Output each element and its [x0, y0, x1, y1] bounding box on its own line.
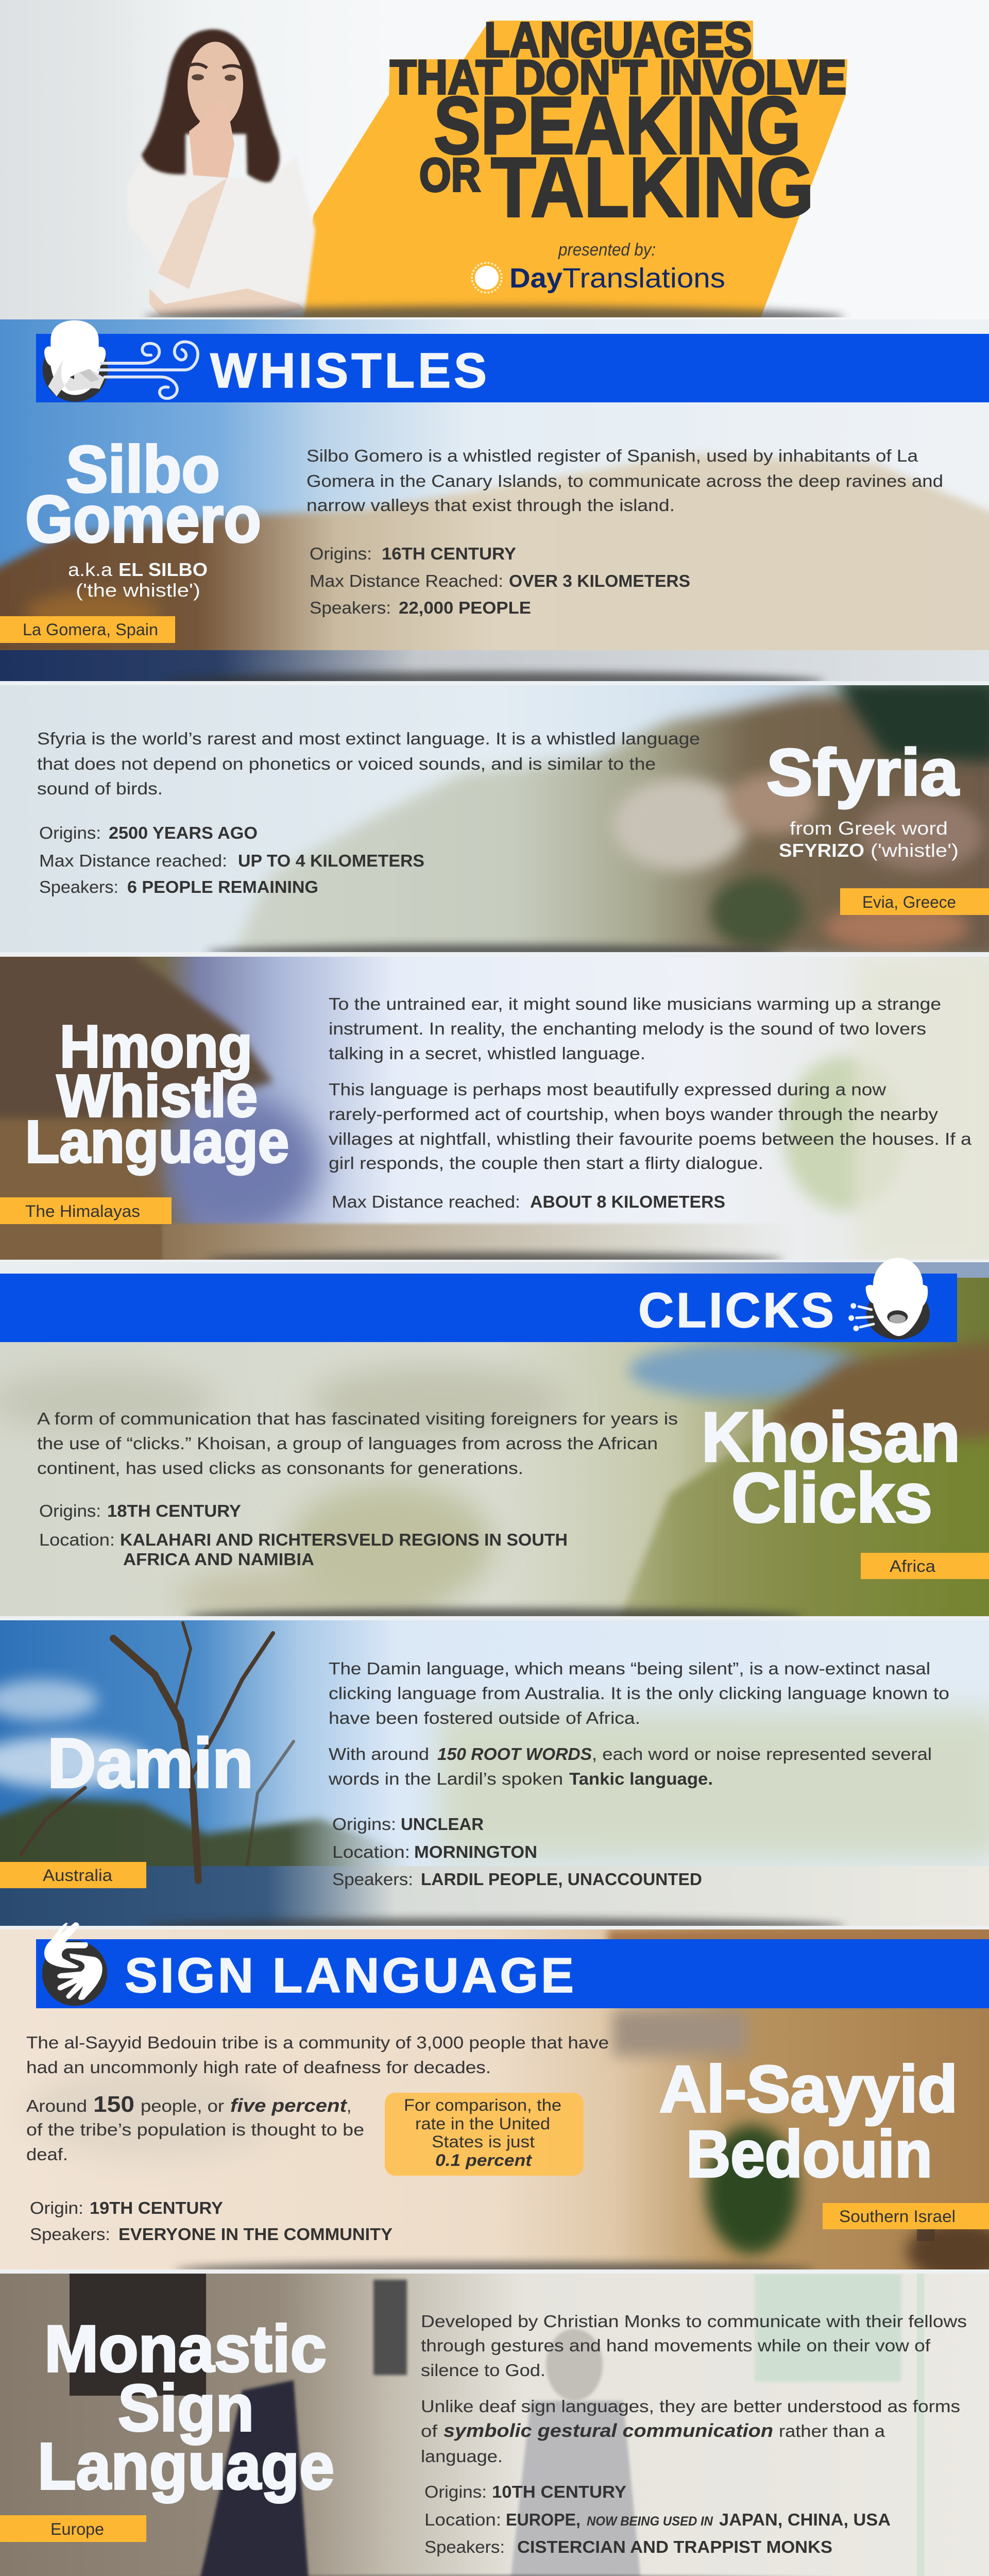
description: instrument. In reality, the enchanting melody is the sound of two lovers	[329, 1019, 926, 1038]
description	[329, 994, 972, 1173]
title: THAT DON'T INVOLVE	[390, 50, 846, 104]
description: words in the Lardil’s spoken	[328, 1769, 563, 1788]
language name heading: Al-Sayyid	[659, 2053, 958, 2126]
title: OR	[419, 149, 481, 201]
language name heading	[659, 2053, 958, 2191]
language name heading	[38, 2312, 334, 2503]
icon: whistling head	[43, 320, 198, 402]
background photo: monks by stone wall	[0, 2269, 989, 2576]
banner: sign language	[36, 1922, 989, 2008]
facts	[30, 2198, 393, 2244]
description	[37, 1409, 678, 1478]
divider strip	[0, 2269, 989, 2274]
description: had an uncommonly high rate of deafness for decades.	[26, 2058, 491, 2077]
subtitle	[779, 818, 959, 861]
facts: Speakers:	[424, 2537, 505, 2556]
divider strip	[0, 1926, 989, 1929]
description	[26, 2033, 609, 2164]
facts	[424, 2482, 891, 2556]
presented by logo: Translations	[562, 263, 725, 294]
facts: Origins:	[424, 2482, 487, 2501]
banner: whistles	[36, 320, 989, 402]
facts: AFRICA AND NAMIBIA	[123, 1550, 314, 1569]
facts: EUROPE,	[506, 2510, 581, 2529]
facts: 16TH CENTURY	[382, 544, 516, 563]
facts: ABOUT 8 KILOMETERS	[530, 1192, 725, 1211]
description	[37, 729, 700, 798]
location label: Europe	[50, 2520, 104, 2538]
location label	[823, 2203, 989, 2229]
facts: Speakers:	[39, 877, 118, 896]
language name heading: Bedouin	[686, 2117, 932, 2191]
background photo: thatched hut and misty valley	[0, 948, 989, 1267]
panel: Sfyria	[0, 680, 989, 960]
facts: 22,000 PEOPLE	[399, 598, 531, 617]
presented by logo	[472, 240, 725, 294]
callout: comparison with US rate	[385, 2093, 584, 2176]
title: LANGUAGES	[484, 12, 752, 67]
description: Gomera in the Canary Islands, to communicate across the deep ravines and	[306, 471, 943, 490]
description: Around	[26, 2096, 87, 2115]
description: of	[421, 2421, 438, 2441]
description: rarely-performed act of courtship, when boys wander through the nearby	[329, 1105, 939, 1124]
background photo: La Gomera cliffs	[0, 319, 989, 690]
description: people, or	[141, 2096, 224, 2115]
title	[390, 12, 846, 234]
description: five percent	[230, 2095, 348, 2116]
facts: Max Distance Reached:	[310, 571, 503, 590]
language name heading: Monastic	[44, 2312, 327, 2386]
callout: comparison with US rate: rate in the United	[415, 2114, 550, 2133]
facts: Max Distance reached:	[39, 851, 227, 870]
facts: 19TH CENTURY	[90, 2198, 223, 2217]
description: , each word or noise represented several	[592, 1744, 932, 1764]
callout: comparison with US rate: 0.1 percent	[435, 2151, 532, 2170]
description: villages at nightfall, whistling their favourite poems between the houses. If a	[329, 1129, 972, 1148]
icon: clicking head	[850, 1258, 930, 1340]
facts: Origin:	[30, 2198, 83, 2217]
subtitle: SFYRIZO	[779, 840, 864, 861]
facts: 10TH CENTURY	[492, 2482, 626, 2501]
location label: Africa	[890, 1557, 935, 1575]
a.k.a subtitle: ('the whistle')	[76, 580, 200, 601]
background photo: African canyon	[0, 1262, 989, 1628]
facts: 6 PEOPLE REMAINING	[127, 877, 318, 896]
description: the use of “clicks.” Khoisan, a group of languages from across the African	[37, 1434, 658, 1453]
banner: whistles: WHISTLES	[210, 343, 487, 398]
language name heading: Language	[25, 1108, 289, 1175]
facts: Origins:	[332, 1815, 396, 1834]
language name heading: Sign	[118, 2371, 254, 2445]
divider strip	[0, 952, 989, 957]
location label: La Gomera, Spain	[23, 620, 158, 639]
description: sound of birds.	[37, 779, 163, 798]
panel: Silbo Gomero	[0, 319, 989, 690]
header section	[0, 0, 847, 319]
panel: Damin	[0, 1620, 989, 1934]
description: Developed by Christian Monks to communicate with their fellows	[421, 2312, 967, 2331]
location label: Southern Israel	[839, 2207, 956, 2226]
description: rather than a	[779, 2421, 885, 2441]
facts	[310, 544, 690, 617]
language name heading: Language	[38, 2430, 334, 2503]
description: Unlike deaf sign languages, they are better understood as forms	[421, 2397, 960, 2416]
subtitle: from Greek word	[790, 818, 948, 839]
description: Sfyria is the world’s rarest and most extinct language. It is a whistled language	[37, 729, 700, 748]
location label	[0, 1862, 146, 1888]
description: have been fostered outside of Africa.	[329, 1708, 640, 1727]
background photo: stone buildings in Israel	[0, 1929, 989, 2282]
panel: Hmong Whistle Language	[0, 948, 989, 1267]
facts: NOW BEING USED IN	[587, 2514, 713, 2529]
location label	[0, 616, 175, 643]
language name heading: Hmong	[60, 1013, 252, 1080]
facts: Speakers:	[310, 598, 391, 617]
description: ,	[347, 2096, 351, 2115]
language name heading: Gomero	[25, 483, 261, 556]
a.k.a subtitle: a.k.a	[68, 559, 113, 580]
location label	[861, 1553, 989, 1579]
description: talking in a secret, whistled language.	[329, 1044, 645, 1063]
callout: comparison with US rate: States is just	[432, 2132, 535, 2151]
title: SPEAKING	[434, 80, 801, 171]
facts: EVERYONE IN THE COMMUNITY	[118, 2225, 393, 2244]
facts: CISTERCIAN AND TRAPPIST MONKS	[517, 2537, 832, 2556]
banner: sign language: SIGN LANGUAGE	[125, 1948, 574, 2003]
presented by logo: Day	[509, 263, 562, 294]
facts: 2500 YEARS AGO	[109, 823, 258, 842]
language name heading	[25, 1013, 289, 1175]
description: A form of communication that has fascinated visiting foreigners for years is	[37, 1409, 678, 1428]
facts: Origins:	[39, 823, 101, 842]
description	[328, 1659, 949, 1788]
description: Tankic language.	[569, 1769, 713, 1788]
panel: Khoisan Clicks	[0, 1262, 989, 1628]
location label: Australia	[43, 1866, 112, 1885]
description: 150 ROOT WORDS	[437, 1744, 592, 1764]
location label	[840, 888, 989, 915]
facts: Location:	[39, 1530, 115, 1549]
facts	[39, 1501, 568, 1569]
facts: KALAHARI AND RICHTERSVELD REGIONS IN SOUTH	[120, 1530, 568, 1549]
banner: clicks	[0, 1258, 957, 1342]
facts: Speakers:	[30, 2225, 110, 2244]
facts: JAPAN, CHINA, USA	[719, 2510, 891, 2529]
facts	[332, 1192, 725, 1211]
facts: UNCLEAR	[401, 1815, 484, 1834]
photo of woman covering her mouth	[126, 29, 315, 317]
description: The Damin language, which means “being silent”, is a now-extinct nasal	[329, 1659, 930, 1678]
description	[306, 446, 943, 515]
description: silence to God.	[421, 2361, 545, 2380]
facts	[39, 823, 424, 896]
subtitle: ('whistle')	[871, 840, 959, 861]
description: deaf.	[26, 2145, 68, 2164]
description: of the tribe’s population is thought to be	[26, 2120, 364, 2139]
description: language.	[421, 2447, 503, 2466]
header background	[0, 0, 989, 319]
language name heading: Silbo	[66, 433, 220, 506]
location label	[0, 1197, 172, 1224]
description: This language is perhaps most beautifully expressed during a now	[329, 1080, 886, 1099]
description: symbolic gestural communication	[444, 2420, 773, 2441]
header bottom shadow	[142, 300, 847, 317]
panel: Monastic Sign Language	[0, 2269, 989, 2576]
description: The al-Sayyid Bedouin tribe is a community of 3,000 people that have	[26, 2033, 609, 2052]
facts: Origins:	[39, 1501, 101, 1520]
facts	[332, 1815, 702, 1889]
facts: 18TH CENTURY	[107, 1501, 241, 1520]
facts: Speakers:	[332, 1870, 413, 1889]
yellow title shape	[290, 21, 847, 317]
a.k.a subtitle: EL SILBO	[118, 559, 208, 580]
language name heading: Khoisan	[702, 1398, 960, 1476]
description: To the untrained ear, it might sound like musicians warming up a strange	[329, 994, 941, 1013]
description: 150	[93, 2092, 134, 2117]
description: through gestures and hand movements while on their vow of	[421, 2336, 931, 2355]
description: Silbo Gomero is a whistled register of Spanish, used by inhabitants of La	[306, 446, 918, 465]
divider strip	[0, 1616, 989, 1620]
facts: LARDIL PEOPLE, UNACCOUNTED	[421, 1870, 702, 1889]
background photo: Australian lake with dead trees	[0, 1620, 989, 1934]
facts: OVER 3 KILOMETERS	[509, 571, 690, 590]
presented by logo: presented by:	[558, 240, 656, 260]
language name heading	[25, 433, 261, 556]
facts: Max Distance reached:	[332, 1192, 520, 1211]
description: With around	[329, 1744, 429, 1764]
description: narrow valleys that exist through the island.	[306, 496, 675, 515]
location label: Evia, Greece	[862, 893, 956, 911]
banner: clicks: CLICKS	[638, 1283, 834, 1338]
facts: UP TO 4 KILOMETERS	[238, 851, 424, 870]
facts: Location:	[424, 2510, 501, 2529]
icon: signing hands	[42, 1922, 107, 2006]
facts: Location:	[332, 1842, 410, 1861]
a.k.a subtitle	[68, 559, 208, 601]
location label	[0, 2515, 146, 2542]
description: continent, has used clicks as consonants for generations.	[37, 1459, 523, 1478]
language name heading: Clicks	[731, 1459, 932, 1537]
language name heading: Sfyria	[766, 736, 959, 809]
callout: comparison with US rate: For comparison, the	[404, 2096, 561, 2114]
panel: Al-Sayyid Bedouin	[0, 1929, 989, 2282]
location label: The Himalayas	[25, 1202, 140, 1221]
description: that does not depend on phonetics or voiced sounds, and is similar to the	[37, 754, 656, 773]
language name heading: Whistle	[57, 1062, 258, 1129]
language name heading	[702, 1398, 960, 1537]
language name heading: Damin	[47, 1724, 253, 1802]
description: clicking language from Australia. It is the only clicking language known to	[329, 1684, 949, 1703]
facts: MORNINGTON	[414, 1842, 537, 1861]
title: TALKING	[491, 140, 814, 234]
background photo: Evia hillside town	[0, 680, 989, 960]
description: girl responds, the couple then start a flirty dialogue.	[329, 1154, 763, 1173]
facts: Origins:	[310, 544, 372, 563]
divider strip	[0, 681, 989, 685]
description	[421, 2312, 967, 2466]
divider strip	[0, 1260, 989, 1262]
